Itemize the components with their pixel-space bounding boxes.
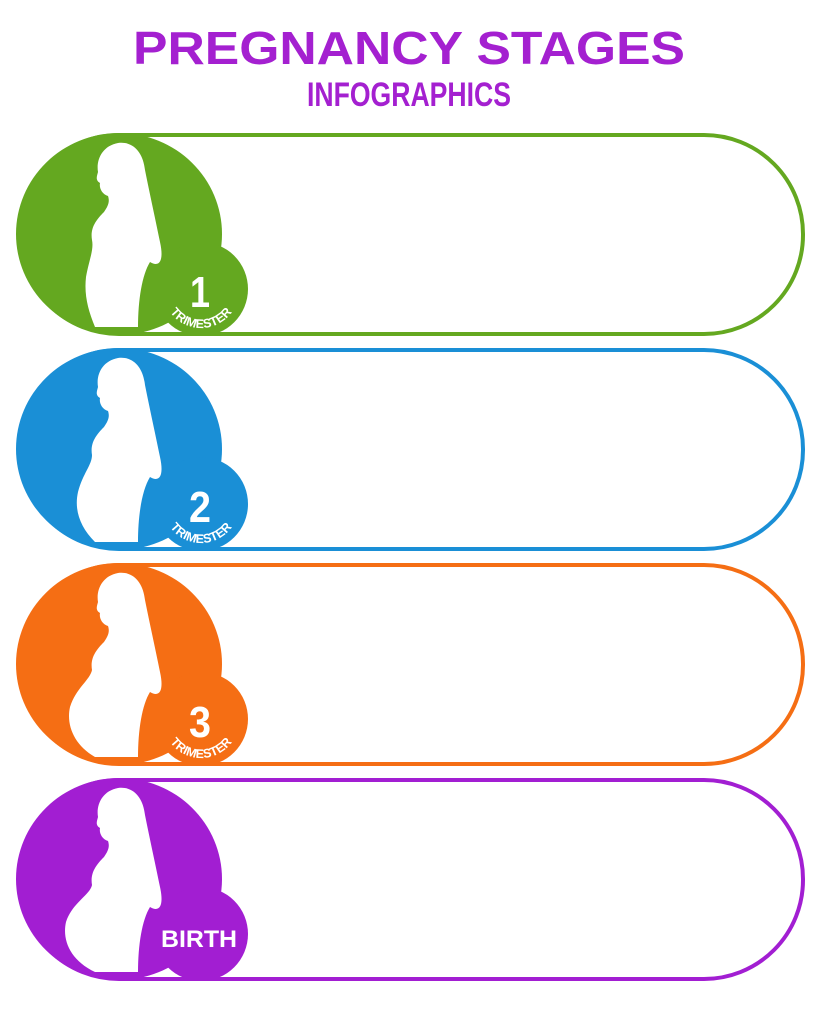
label: 2 trimester [172,483,232,544]
panel: birth [16,778,803,981]
icon: pregnant silhouette 3 [69,573,162,757]
label: birth: BIRTH [161,926,237,953]
label: 3 trimester [172,698,232,758]
label: 2 trimester: 2 [189,483,211,532]
icon: pregnant silhouette 1 [85,143,162,327]
title: INFOGRAPHICS [307,76,511,114]
panel: trimester 1 [16,133,805,336]
panel: trimester 3 [16,563,805,766]
icon: pregnant silhouette 4 [65,788,162,972]
label: 1 trimester: 1 [190,268,210,317]
panel: trimester 2 [16,348,805,551]
label: 3 trimester: 3 [189,698,211,747]
label: 3 trimester: TRIMESTER [172,736,232,758]
title: PREGNANCY STAGES [133,22,685,74]
label: 1 trimester: TRIMESTER [172,306,232,328]
title [133,22,685,114]
label: 2 trimester: TRIMESTER [172,522,232,544]
label: 1 trimester [172,268,232,328]
icon: pregnant silhouette 2 [77,358,162,542]
